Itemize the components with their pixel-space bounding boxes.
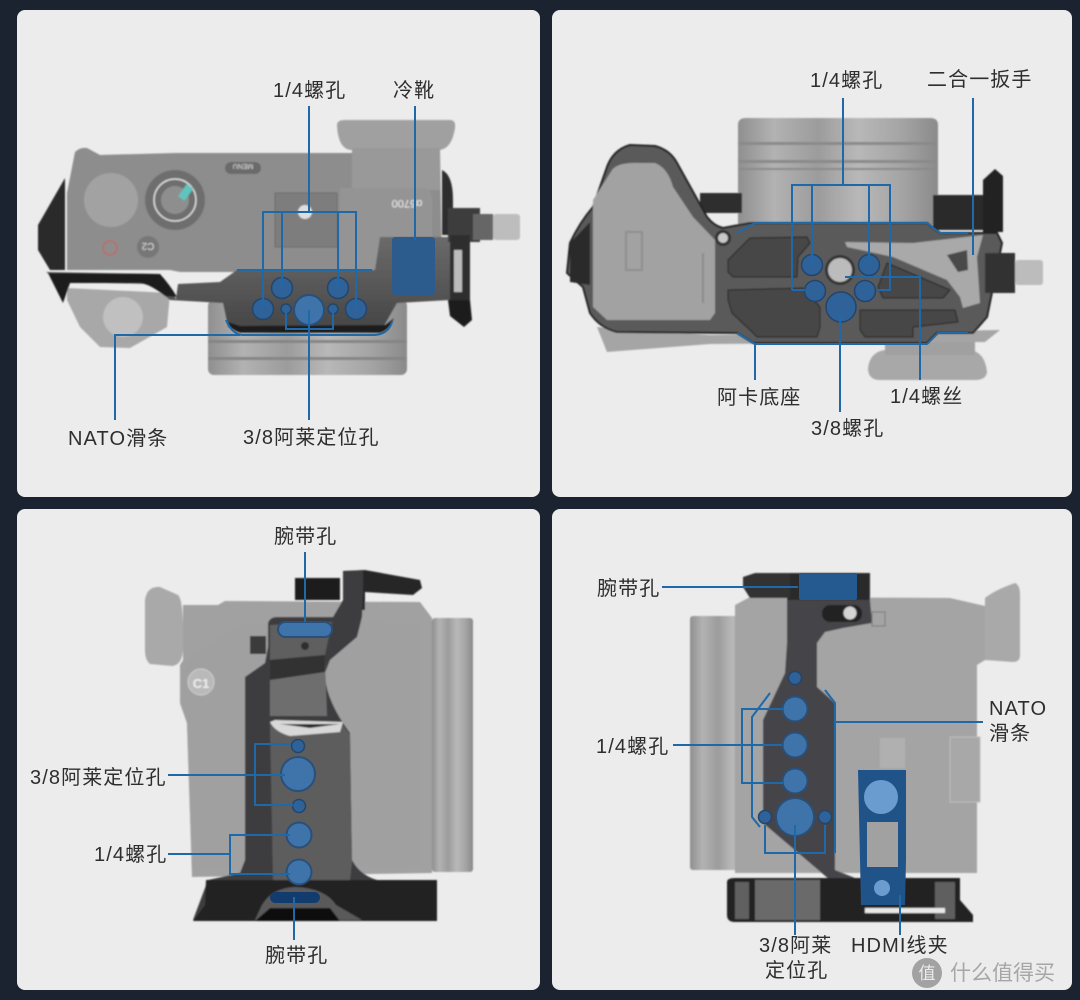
HDMI cable clamp highlight xyxy=(858,770,906,905)
label: 3/8 screw hole: 3/8螺孔 xyxy=(811,417,884,440)
label: strap hole bottom: 腕带孔 xyxy=(265,944,328,967)
label: strap hole: 腕带孔 xyxy=(597,577,660,600)
label: 1/4 screw: 1/4螺丝 xyxy=(890,385,963,408)
watermark: 什么值得买 xyxy=(950,962,1055,985)
leader lines xyxy=(662,587,983,935)
mounting holes xyxy=(802,254,880,322)
panel: grip-side view xyxy=(17,509,540,990)
label: cold shoe: 冷靴 xyxy=(393,79,435,102)
label: 3/8 ARRI locating hole: 定位孔 xyxy=(765,959,828,982)
illustration: camera top view with cage xyxy=(38,120,520,375)
label: 3/8 ARRI locating hole: 3/8阿莱 xyxy=(759,934,832,957)
label: strap hole top: 腕带孔 xyxy=(274,525,337,548)
illustration: camera side view with cage xyxy=(145,570,473,921)
panel: top view of camera and cage xyxy=(17,10,540,497)
leader lines xyxy=(737,98,973,412)
label: HDMI cable clamp: HDMI线夹 xyxy=(851,934,949,957)
panel: bottom view of camera and cage xyxy=(552,10,1072,497)
label: 2-in-1 wrench: 二合一扳手 xyxy=(927,68,1032,91)
label: NATO rail: NATO xyxy=(989,698,1047,720)
label: 1/4 screw hole: 1/4螺孔 xyxy=(94,843,167,866)
label: NATO rail xyxy=(989,698,1047,745)
label: NATO rail: NATO滑条 xyxy=(68,427,168,450)
label: 3/8 ARRI locating hole: 3/8阿莱定位孔 xyxy=(243,426,380,449)
label: NATO rail: 滑条 xyxy=(989,722,1031,745)
mounting holes xyxy=(758,573,857,836)
watermark: 值 xyxy=(918,964,936,983)
illustration: camera side view with cage: C1 xyxy=(193,676,209,691)
label: 1/4 screw hole: 1/4螺孔 xyxy=(810,69,883,92)
mounting holes xyxy=(252,278,366,325)
cold shoe highlight xyxy=(392,237,435,295)
illustration: camera top view with cage: MENU xyxy=(233,162,253,169)
illustration: camera side view with cage xyxy=(690,573,1020,922)
illustration: camera top view with cage: C2 xyxy=(141,240,154,251)
leader lines xyxy=(168,552,305,940)
label: Arca base: 阿卡底座 xyxy=(717,386,801,409)
illustration: camera top view with cage: α6700 xyxy=(392,197,422,209)
label: 1/4 screw hole: 1/4螺孔 xyxy=(596,735,669,758)
mounting holes xyxy=(270,622,332,903)
label: 3/8 ARRI locating hole: 3/8阿莱定位孔 xyxy=(30,766,167,789)
panel: port-side view xyxy=(552,509,1072,990)
label: 1/4 screw hole: 1/4螺孔 xyxy=(273,79,346,102)
watermark xyxy=(912,958,1055,988)
illustration: camera base with cage xyxy=(567,118,1043,380)
label: 3/8 ARRI locating hole xyxy=(759,934,832,982)
leader lines xyxy=(115,106,415,420)
